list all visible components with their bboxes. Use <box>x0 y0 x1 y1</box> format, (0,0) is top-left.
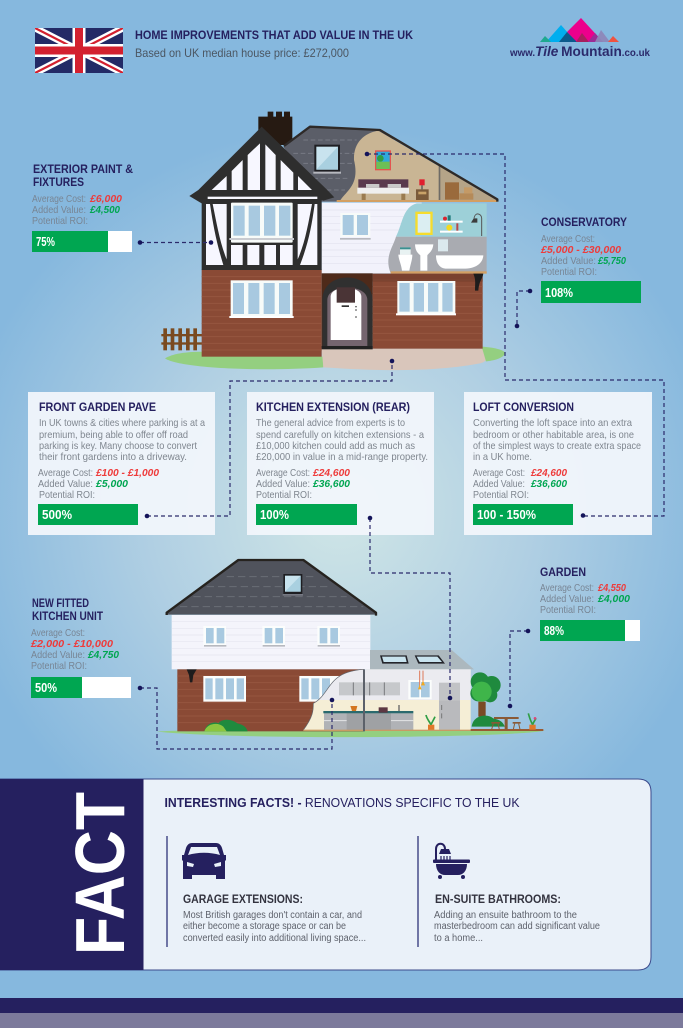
callout: exterior paint and fixtures: £4,500 <box>89 204 120 216</box>
divider <box>167 836 418 947</box>
roof skylight <box>283 574 303 596</box>
connector: garden <box>508 629 530 708</box>
callout: exterior paint and fixtures: Potential ROI: <box>32 215 88 227</box>
fact: en-suite bathrooms: to a home... <box>434 933 483 944</box>
panel: kitchen extension: 100% <box>260 507 289 522</box>
fact: en-suite bathrooms: EN-SUITE BATHROOMS: <box>435 894 561 906</box>
connector: new fitted kitchen unit <box>138 686 334 749</box>
callout: new fitted kitchen unit: 50% <box>35 680 57 695</box>
garden furniture and floor <box>471 713 543 731</box>
icon: bathtub <box>433 844 470 879</box>
callout: new fitted kitchen unit: Added Value: <box>31 649 85 661</box>
tudor gable <box>189 127 334 270</box>
callout: garden: £4,000 <box>597 593 630 605</box>
panel: kitchen extension: spend carefully on kitchen extensions - a <box>256 429 424 441</box>
logo: Tile Mountain: www.Tile Mountain.co.uk <box>509 43 650 59</box>
panel: loft conversion: 100 - 150% <box>477 507 536 522</box>
fact: garage extensions: GARAGE EXTENSIONS: <box>183 894 303 906</box>
panel: front garden pave: In UK towns & cities where parking is at a <box>39 417 205 429</box>
upper windows <box>203 626 340 647</box>
panel: front garden pave: £5,000 <box>95 478 128 490</box>
brick wall <box>177 669 364 731</box>
lower windows <box>203 676 343 702</box>
callout: exterior paint and fixtures: Added Value: <box>32 204 86 216</box>
callout: conservatory: Average Cost: <box>541 233 595 245</box>
callout: conservatory <box>540 217 641 303</box>
main roof <box>166 560 377 616</box>
illustration: front of house with cutaway <box>161 112 505 370</box>
panel: front garden pave: FRONT GARDEN PAVE <box>39 402 156 414</box>
left brick wall <box>202 269 322 357</box>
white upper storey <box>172 615 370 669</box>
callout: new fitted kitchen unit: KITCHEN UNIT <box>32 611 103 623</box>
panel: kitchen extension: £36,600 <box>312 478 350 490</box>
panel: kitchen extension: £10,000 kitchen could add as much as <box>256 440 415 452</box>
grey roof <box>283 126 393 202</box>
connector: kitchen extension <box>368 516 452 700</box>
callout: exterior paint and fixtures: Average Cost: <box>32 193 86 205</box>
panel: kitchen extension: Average Cost: <box>256 467 310 479</box>
connector: loft conversion <box>365 152 664 518</box>
panel: kitchen extension: The general advice from experts is to <box>256 417 405 429</box>
panel: loft conversion: LOFT CONVERSION <box>473 402 574 414</box>
callout: conservatory: Potential ROI: <box>541 266 597 278</box>
panel: loft conversion <box>464 392 652 535</box>
callout: new fitted kitchen unit: Average Cost: <box>31 627 85 639</box>
callout: conservatory: CONSERVATORY <box>541 217 627 229</box>
callout: new fitted kitchen unit: Potential ROI: <box>31 660 87 672</box>
subtitle: Based on UK median house price: £272,000 <box>135 46 349 60</box>
footer band <box>0 998 683 1028</box>
callout: conservatory: £5,750 <box>597 255 626 267</box>
callout: exterior paint and fixtures: EXTERIOR PAINT & <box>33 164 133 176</box>
panel: loft conversion: £24,600 <box>530 467 567 479</box>
connector: exterior paint <box>138 240 213 245</box>
chimney <box>258 112 292 145</box>
callout: exterior paint and fixtures: £6,000 <box>89 193 122 205</box>
callout: garden: Potential ROI: <box>540 604 596 616</box>
tree <box>470 672 505 727</box>
callout: garden: GARDEN <box>540 567 586 579</box>
icon: UK flag <box>35 28 123 73</box>
panel: loft conversion: Average Cost: <box>473 467 525 479</box>
brick lines <box>177 676 363 723</box>
panel: front garden pave: Potential ROI: <box>39 489 95 501</box>
callout: garden: 88% <box>544 623 564 638</box>
panel: interesting facts <box>0 779 651 970</box>
fact: en-suite bathrooms <box>434 894 600 944</box>
panel: front garden pave: parking is key. Many choose to convert <box>39 440 197 452</box>
callout: garden: £4,550 <box>597 582 626 594</box>
fact: garage extensions: Most British garages don't contain a car, and <box>183 910 362 921</box>
panel: loft conversion: of the simplest ways to create extra space <box>473 440 641 452</box>
callout: exterior paint and fixtures: 75% <box>36 234 55 249</box>
fact sidebar <box>0 779 144 970</box>
panel: loft conversion: in a UK home. <box>473 451 532 463</box>
porch and door <box>322 273 373 349</box>
bathroom cutaway <box>388 203 487 274</box>
callout: exterior paint and fixtures: FIXTURES <box>33 177 84 189</box>
ground <box>165 347 505 370</box>
fact: garage extensions: converted easily into additional living space... <box>183 933 366 944</box>
icon: car <box>182 843 226 879</box>
panel: kitchen extension: £20,000 in value in a mid-range property. <box>256 451 428 463</box>
callout: garden: Average Cost: <box>540 582 594 594</box>
title: HOME IMPROVEMENTS THAT ADD VALUE IN THE UK <box>135 30 414 42</box>
fact: garage extensions: either become a storage space or can be <box>183 921 346 932</box>
callout: garden <box>540 567 640 641</box>
connector: front garden pave <box>145 359 394 518</box>
callout: new fitted kitchen unit <box>30 598 131 698</box>
post <box>363 669 365 731</box>
panel: kitchen extension: £24,600 <box>312 467 350 479</box>
panel: loft conversion: Converting the loft space into an extra <box>473 417 632 429</box>
kitchen cutaway <box>303 669 471 731</box>
panel: front garden pave: £100 - £1,000 <box>95 467 159 479</box>
panel: kitchen extension: Added Value: <box>256 478 310 490</box>
callout: conservatory: 108% <box>545 285 573 300</box>
panel: front garden pave: Added Value: <box>38 478 93 490</box>
logo: Tile Mountain <box>509 18 650 59</box>
skylight <box>313 145 341 174</box>
callout: garden: Added Value: <box>540 593 594 605</box>
ground floor window left <box>229 280 294 318</box>
illustration: rear of house with extension <box>157 560 545 737</box>
panel: kitchen extension: Potential ROI: <box>256 489 312 501</box>
roof lights <box>380 655 445 664</box>
connector: conservatory <box>515 289 532 328</box>
roof edge <box>284 127 497 202</box>
panel: loft conversion: £36,600 <box>530 478 567 490</box>
panel: kitchen extension: KITCHEN EXTENSION (REAR) <box>256 402 410 414</box>
callout: new fitted kitchen unit: NEW FITTED <box>32 598 89 610</box>
panel: front garden pave: 500% <box>42 507 72 522</box>
white cladding <box>322 203 422 273</box>
fact label: FACT <box>61 792 139 955</box>
callout: new fitted kitchen unit: £4,750 <box>87 649 119 661</box>
fact: en-suite bathrooms: masterbedroom can add significant value <box>434 921 600 932</box>
panel: front garden pave: Average Cost: <box>38 467 93 479</box>
fence <box>161 328 202 350</box>
fact: garage extensions <box>183 894 366 944</box>
bush <box>204 720 248 731</box>
loft bedroom <box>337 131 497 202</box>
callout: exterior paint and fixtures <box>32 164 133 252</box>
extension roof <box>370 650 474 669</box>
panel: front garden pave: their front gardens into a driveway. <box>39 451 187 463</box>
panel: loft conversion: Potential ROI: <box>473 489 529 501</box>
panel: loft conversion: bedroom or other habitable area, is one <box>473 429 634 441</box>
right brick wall <box>373 274 483 349</box>
callout: conservatory: Added Value: <box>541 255 596 267</box>
panel: kitchen extension <box>247 392 434 535</box>
ground floor window right <box>396 281 456 315</box>
callout: new fitted kitchen unit: £2,000 - £10,000 <box>30 638 113 650</box>
callout: conservatory: £5,000 - £30,000 <box>540 244 621 256</box>
ground strip <box>157 729 545 737</box>
panel: front garden pave <box>28 392 215 535</box>
brick lines <box>202 277 483 350</box>
cladding window <box>340 213 371 240</box>
panel: loft conversion: Added Value: <box>473 478 525 490</box>
fact: en-suite bathrooms: Adding an ensuite bathroom to the <box>434 910 577 921</box>
panel: front garden pave: premium, being able to offer off road <box>39 429 188 441</box>
facts heading: INTERESTING FACTS! - RENOVATIONS SPECIFIC TO THE UK <box>164 796 520 810</box>
